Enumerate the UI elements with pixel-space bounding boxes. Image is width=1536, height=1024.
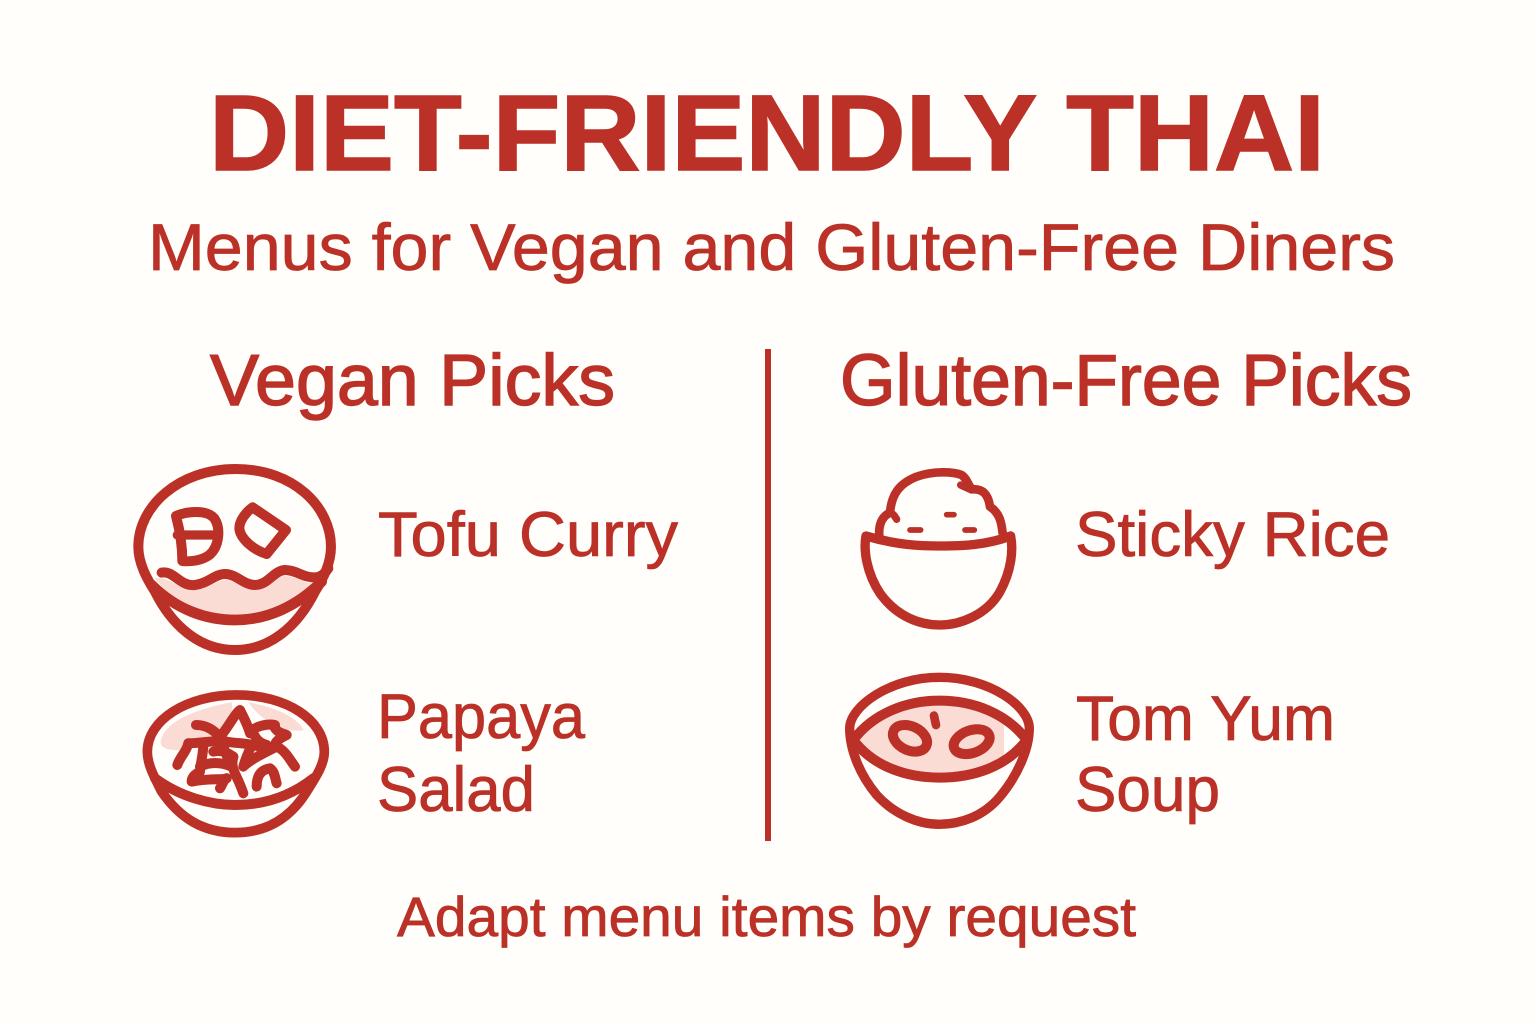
label: sticky rice: Sticky Rice xyxy=(1075,500,1390,570)
label: papaya salad: Papaya xyxy=(377,682,586,752)
icon: tom yum soup bowl xyxy=(850,677,1029,824)
label: tofu curry: Tofu Curry xyxy=(378,500,679,570)
label: tom yum soup: Tom Yum xyxy=(1076,684,1335,754)
label: tom yum soup: Soup xyxy=(1075,755,1220,825)
label: papaya salad: Salad xyxy=(377,755,535,825)
label: papaya salad xyxy=(377,682,586,825)
heading: vegan picks: Vegan Picks xyxy=(210,341,615,421)
title: DIET-FRIENDLY THAI xyxy=(209,72,1325,193)
icon: papaya salad bowl xyxy=(147,695,324,833)
heading: gluten-free picks: Gluten-Free Picks xyxy=(840,341,1412,421)
icon: tofu curry bowl xyxy=(138,469,331,650)
label: tom yum soup xyxy=(1075,684,1335,825)
divider between columns xyxy=(765,349,771,841)
icon: sticky rice bowl xyxy=(865,472,1012,625)
footer note: Adapt menu items by request xyxy=(397,885,1136,948)
subtitle: Menus for Vegan and Gluten-Free Diners xyxy=(148,210,1395,284)
